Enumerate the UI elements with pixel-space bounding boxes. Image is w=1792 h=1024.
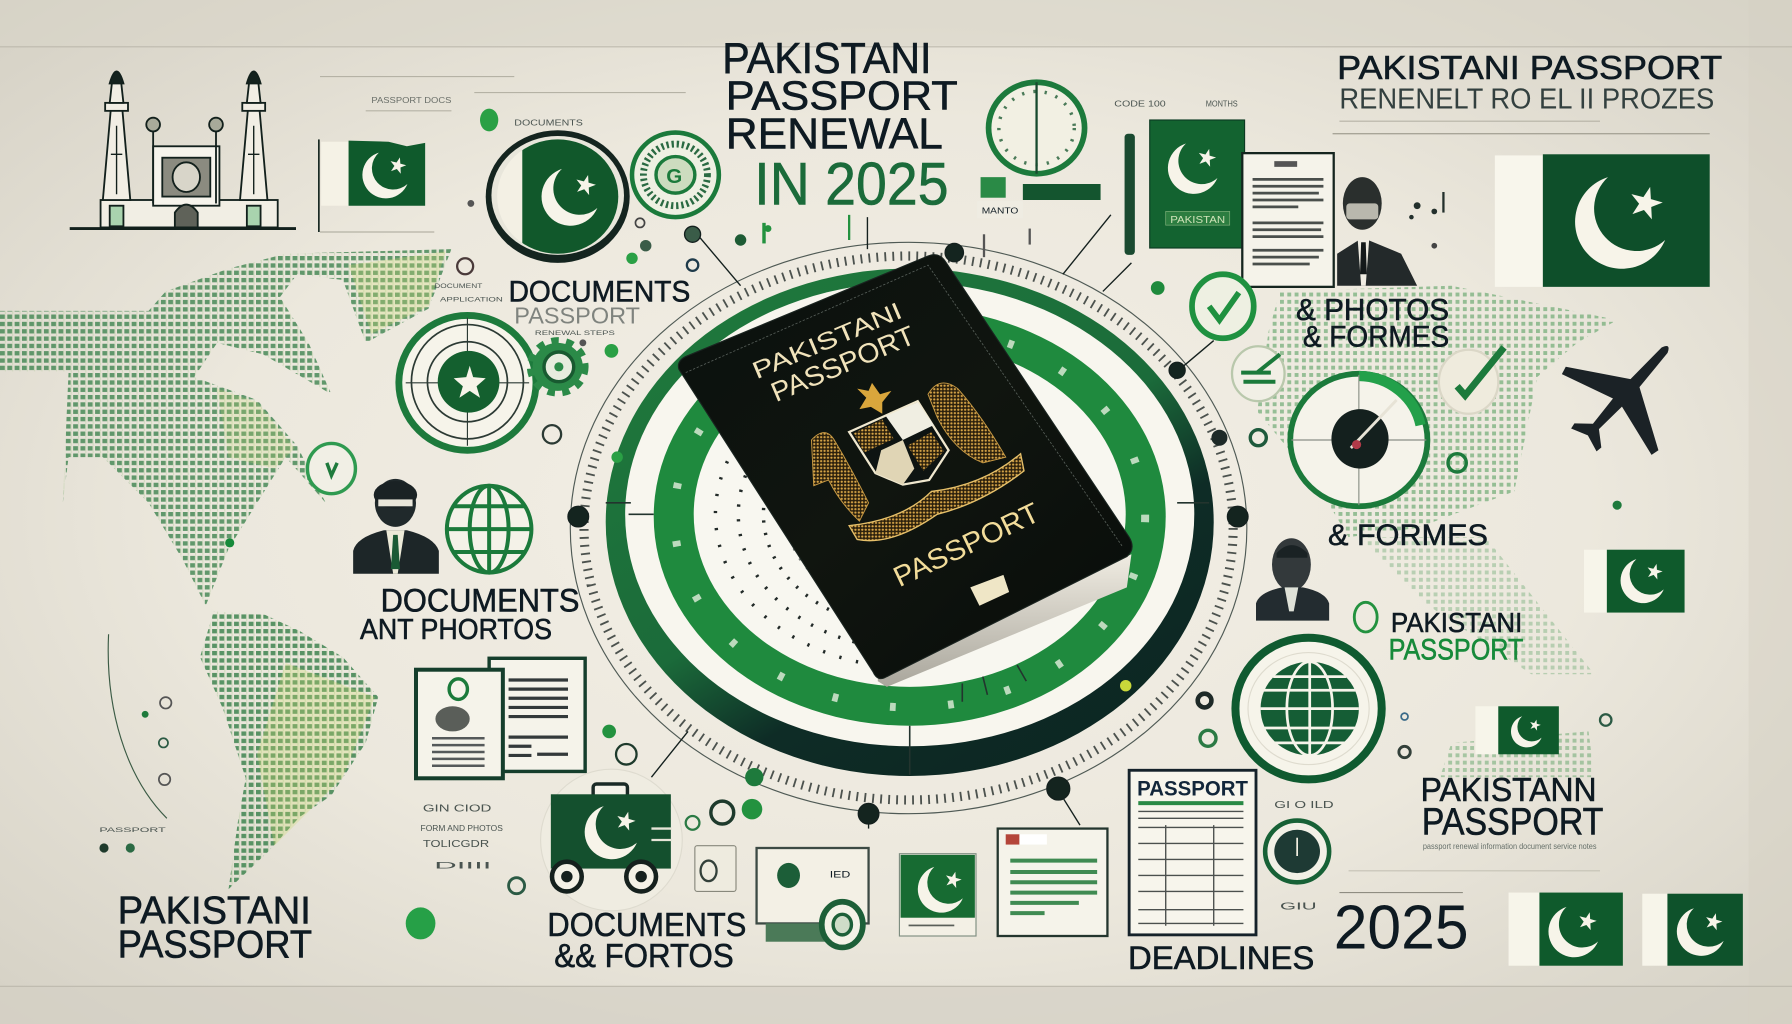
chip symbol [970, 575, 1009, 606]
ring connector nodes and leaders [568, 215, 1248, 829]
world map: north america [0, 249, 451, 606]
central ring: dark and green band [606, 269, 1214, 776]
documents label upper: DOCUMENTS [509, 276, 690, 309]
person icon right [1256, 538, 1329, 621]
documents and fortos label: DOCUMENTS [547, 907, 746, 944]
passport pages [878, 554, 1131, 687]
tiny caption marks: DIIII [434, 861, 491, 871]
documents and fortos label: && FORTOS [554, 938, 734, 975]
tiny caption marks: GI O ILD [1274, 800, 1334, 811]
pakistani passport green label: PASSPORT [1389, 633, 1523, 666]
globe badge right [1235, 638, 1382, 779]
thin map arc [108, 634, 167, 818]
tiny caption marks: DOCUMENT [434, 283, 483, 290]
documents and photos label [360, 582, 579, 646]
tiny caption marks [99, 96, 1334, 913]
mid right flag [1475, 706, 1559, 754]
main title: RENEWAL [726, 111, 943, 159]
deadlines label: DEADLINES [1128, 940, 1314, 976]
tiny caption marks: RENEWAL STEPS [535, 330, 615, 337]
pakistani passport green label [1389, 607, 1523, 666]
passport cover title [748, 298, 920, 408]
label: photos and forms [1296, 292, 1449, 353]
airplane icon [1537, 305, 1714, 482]
globe icon left [447, 486, 531, 573]
main title: IN 2025 [754, 150, 949, 218]
right flag [1584, 550, 1685, 613]
documents and fortos label [547, 907, 746, 975]
passport form with table [1129, 770, 1256, 935]
main title: PAKISTANI [722, 35, 931, 83]
application sheet [998, 829, 1107, 936]
green passport booklet: PAKISTAN [1170, 215, 1225, 226]
main title: PASSPORT [726, 73, 958, 119]
delivery van with flag [541, 769, 682, 911]
flag on pole [319, 139, 425, 232]
passport [678, 255, 1132, 687]
central ring: outer tick scale [570, 242, 1247, 814]
tiny caption marks: FORM AND PHOTOS [421, 824, 503, 833]
documents and photos label: ANT PHORTOS [360, 614, 552, 646]
world map: south america [200, 611, 378, 889]
green passport booklet [1150, 120, 1245, 248]
gauge badge [1290, 374, 1427, 506]
coat of arms [811, 383, 1024, 541]
small ring icon [307, 443, 355, 494]
pakistani passport right label: PASSPORT [1422, 800, 1603, 842]
passport cover title: PASSPORT [766, 319, 920, 408]
small banner bar: MANTO [982, 207, 1018, 216]
clock icon [989, 82, 1085, 174]
tiny caption marks: GIU [1280, 902, 1317, 913]
tiny caption marks: PASSPORT DOCS [371, 96, 451, 105]
scattered micro icons [99, 109, 1622, 939]
small card icon [695, 846, 736, 891]
bottom left label: PASSPORT [118, 924, 312, 967]
top right heading: RENENELT RO EL II PROZES [1339, 84, 1714, 116]
bottom left label [118, 889, 312, 967]
passport cover title: PAKISTANI [748, 298, 906, 385]
target star badge [399, 315, 536, 450]
tiny caption marks: DOCUMENTS [514, 119, 583, 128]
pakistani passport right label [1339, 772, 1603, 893]
bottom left label: PAKISTANI [118, 889, 311, 932]
green flag card [899, 854, 976, 936]
documents label upper [509, 276, 690, 328]
tiny caption marks: CODE 100 [1114, 99, 1166, 108]
large flag [1495, 154, 1710, 287]
pakistani passport right label: passport renewal information document service notes [1423, 842, 1597, 851]
tiny caption marks: MONTHS [1206, 99, 1238, 108]
pakistani passport right label: PAKISTANN [1421, 772, 1597, 809]
year label: 2025 [1334, 894, 1469, 963]
tiny caption marks: TOLICGDR [423, 839, 489, 850]
bank card with ring: IED [830, 870, 851, 880]
passport cover [678, 255, 1132, 679]
tiny caption marks: APPLICATION [440, 297, 503, 304]
id and letter documents [416, 658, 585, 778]
documents label upper: PASSPORT [514, 302, 640, 328]
bottom flag two [1642, 894, 1743, 966]
gear icon [533, 343, 583, 391]
passport label: PASSPORT [889, 497, 1045, 594]
stitching [686, 265, 1122, 546]
pakistani passport green label: PAKISTANI [1391, 607, 1522, 638]
label: photos and forms: & PHOTOS [1296, 292, 1449, 327]
small clock badge [1265, 821, 1329, 882]
seal badge: G [666, 165, 682, 188]
tiny caption marks: GIN CIOD [423, 803, 491, 814]
top right heading [1333, 50, 1722, 134]
small banner bar [977, 177, 1101, 218]
forms label: & FORMES [1328, 519, 1488, 552]
documents and photos label: DOCUMENTS [381, 582, 579, 618]
bottom flag one [1509, 893, 1623, 966]
label: photos and forms: & FORMES [1303, 320, 1449, 353]
person icon left [353, 479, 439, 574]
top right heading: PAKISTANI PASSPORT [1337, 50, 1722, 87]
tiny caption marks: PASSPORT [99, 827, 167, 834]
check disc [1439, 347, 1504, 414]
vertical bar [1125, 134, 1135, 255]
world map: asia and africa fade [1257, 286, 1617, 777]
bank card with ring [757, 848, 869, 947]
seal badge [632, 133, 719, 217]
check badge [1192, 274, 1254, 338]
form document [1242, 153, 1334, 287]
round flag badge [486, 130, 630, 263]
main title [722, 35, 958, 218]
person with mask icon [1337, 177, 1417, 286]
small plane badge [1232, 346, 1285, 401]
mosque illustration [70, 71, 296, 229]
passport form with table: PASSPORT [1137, 777, 1248, 800]
